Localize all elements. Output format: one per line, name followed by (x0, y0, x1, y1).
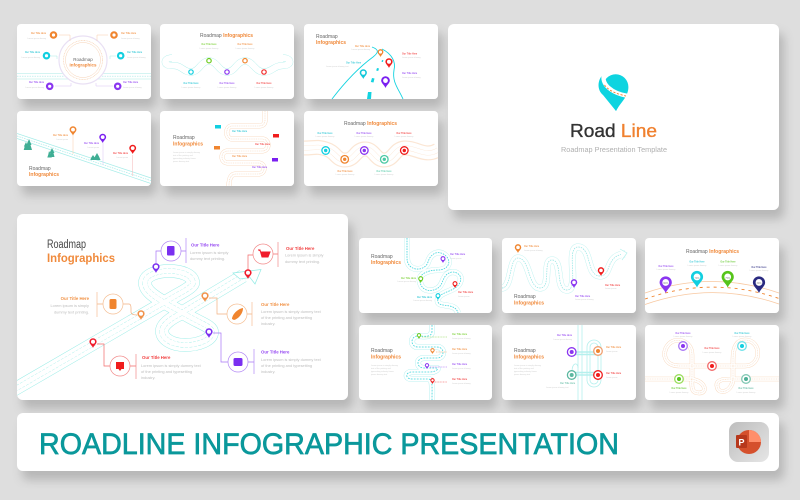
central ring (59, 36, 107, 84)
percent pins (660, 271, 765, 293)
thumbnail: junction road (502, 325, 636, 400)
labels: Lorem ipsum dummy text (546, 386, 569, 389)
text: orange right: Lorem ipsum is simply dummy text (261, 309, 322, 314)
labels: Lorem ipsum dummy (657, 269, 675, 271)
labels: Our Title Here (734, 332, 750, 335)
labels: Our Title Here (356, 132, 372, 135)
roads (572, 325, 601, 400)
labels: Lorem ipsum dummy (255, 87, 273, 89)
flags (214, 125, 279, 162)
paragraph: ipsum dummy text (173, 160, 190, 163)
text: purple lower (261, 350, 322, 374)
connectors (51, 35, 116, 86)
labels: Our Title Here (346, 62, 362, 64)
paragraph (371, 365, 398, 376)
labels (21, 32, 146, 89)
wave road (165, 58, 290, 72)
text: purple top: Our Title Here (191, 242, 220, 248)
heading (371, 254, 401, 266)
labels: Lorem ipsum dummy (452, 338, 471, 340)
road bands (17, 74, 151, 79)
trees (24, 139, 101, 160)
text: orange right (261, 302, 322, 326)
labels: Lorem ipsum dummy text (326, 65, 349, 68)
text: red top: Lorem ipsum is simply (285, 252, 324, 258)
labels: Lorem ipsum dummy (27, 38, 46, 40)
labels: Lorem ipsum dummy (21, 57, 40, 59)
figure-eight road (10, 271, 243, 392)
banner title: ROADLINE INFOGRAPHIC PRESENTATION (39, 428, 619, 461)
labels: Our Title Here (720, 260, 736, 264)
icon: rocket (232, 308, 243, 320)
labels: Our Title Here (402, 52, 418, 56)
labels: Our Title Here (396, 132, 412, 135)
heading (29, 166, 59, 178)
road (17, 134, 151, 184)
pins (70, 126, 136, 154)
text: orange right: of the printing and typesetting (261, 315, 312, 320)
heading: Roadmap (29, 166, 51, 172)
subtitle: Roadmap Presentation Template (561, 147, 667, 154)
labels (232, 130, 271, 169)
heading: Roadmap (514, 348, 536, 354)
text: orange left: Our Title Here (61, 296, 90, 301)
ring title (69, 57, 97, 68)
percent pins: 75% (725, 277, 731, 280)
labels: Lorem ipsum dummy (375, 174, 393, 176)
labels: Our Title Here (232, 155, 248, 158)
heading: Roadmap (371, 348, 393, 354)
heading (371, 348, 401, 360)
marker centres (324, 149, 406, 161)
labels: Our Title Here (355, 45, 371, 48)
labels (524, 245, 621, 301)
node centres (570, 349, 600, 377)
labels: Lorem ipsum dummy (182, 87, 200, 89)
heading (173, 135, 203, 148)
labels: Lorem ipsum dummy (719, 265, 737, 267)
labels (397, 253, 474, 302)
dividers (97, 238, 278, 379)
road (222, 111, 268, 186)
text: orange left: dummy text printing. (54, 310, 89, 314)
labels: Our Title Here (121, 32, 137, 35)
labels (316, 132, 413, 176)
labels: Our Title Here (232, 130, 248, 133)
road (407, 238, 461, 313)
node centres (677, 344, 748, 381)
labels: Lorem ipsum (606, 377, 618, 379)
icon: message (116, 362, 124, 371)
icon: bag (110, 299, 116, 309)
lane dashes (367, 60, 383, 99)
heading (316, 34, 346, 46)
paragraph: ipsum dummy text (514, 373, 531, 376)
labels: Lorem ipsum dummy (316, 136, 334, 138)
text: purple lower: Our Title Here (261, 350, 290, 354)
labels: Our Title Here (84, 142, 100, 145)
labels (546, 334, 622, 389)
labels: Our Title Here (658, 265, 674, 268)
text: purple top: dummy text printing. (190, 256, 225, 261)
thumbnail: circular roadmap (17, 24, 151, 99)
thumbnail: diagonal road with trees (17, 111, 151, 186)
labels: Lorem ipsum dummy (670, 392, 688, 394)
pins (417, 333, 435, 384)
labels: Our Title Here (524, 245, 540, 248)
labels: Our Title Here (201, 43, 217, 46)
banner (17, 413, 779, 471)
road (407, 325, 443, 400)
thumbnail: arc road with percent pins (645, 238, 779, 313)
labels: Our Title Here (557, 334, 573, 337)
labels: Our Title Here (29, 81, 45, 84)
heading: Infographics (173, 142, 203, 148)
thumbnail: looping orange road (645, 325, 779, 400)
paragraph: typesetting industry lorem (173, 157, 196, 160)
text: red lower: industry. (141, 375, 155, 380)
markers (189, 58, 266, 74)
labels: Our Title Here (317, 132, 333, 135)
labels: Lorem ipsum dummy (336, 174, 354, 176)
labels: Our Title Here (123, 81, 139, 84)
labels: Our Title Here (450, 253, 466, 256)
heading: Roadmap (173, 135, 195, 141)
labels: Our Title Here (25, 51, 41, 54)
thumbnail: wave road (160, 24, 294, 99)
paragraph: Lorem ipsum is simply dummy (514, 365, 541, 367)
labels: Lorem ipsum dummy (397, 281, 416, 283)
heading: Infographics (371, 260, 401, 266)
labels: Our Title Here (256, 82, 272, 85)
labels: Lorem ipsum dummy (236, 48, 254, 50)
nodes (567, 347, 602, 379)
labels: Lorem ipsum dummy (553, 339, 572, 341)
text: red top (285, 246, 324, 264)
text: purple lower: Lorem ipsum is simply dummy text (261, 357, 322, 362)
paragraph: typesetting industry lorem (371, 370, 394, 373)
pins (515, 244, 604, 288)
labels: Lorem ipsum dummy (402, 77, 421, 79)
labels: Lorem ipsum dummy (351, 49, 370, 51)
heading: Roadmap Infographics (200, 33, 253, 39)
heading: Infographics (514, 354, 544, 360)
heading: Infographics (514, 300, 544, 306)
labels: Our Title Here (605, 284, 621, 287)
labels: Our Title Here (675, 332, 691, 335)
labels: Our Title Here (452, 363, 468, 366)
labels: Lorem ipsum (450, 258, 462, 260)
labels: Lorem ipsum dummy (355, 136, 373, 138)
markers (322, 147, 408, 163)
percent pins: 70% (694, 277, 700, 280)
labels: Our Title Here (219, 82, 235, 85)
heading: Roadmap (47, 239, 86, 251)
heading: Roadmap (371, 254, 393, 260)
labels: Our Title Here (452, 333, 468, 336)
heading: Roadmap Infographics (344, 121, 397, 127)
labels (670, 332, 755, 394)
labels: Lorem ipsum dummy (750, 270, 768, 272)
text: red lower: Our Title Here (142, 355, 171, 360)
bubbles (43, 31, 125, 90)
heading: Infographics (29, 172, 59, 178)
paragraph: Lorem ipsum is simply dummy (173, 152, 200, 154)
labels: Lorem ipsum dummy (703, 352, 721, 354)
road (645, 340, 779, 393)
labels: Lorem ipsum dummy (452, 353, 471, 355)
labels: Lorem ipsum dummy (413, 300, 432, 302)
text: orange left: Lorem ipsum is simply (51, 303, 89, 308)
paragraph: ipsum dummy text (371, 373, 388, 376)
labels: Lorem ipsum dummy (452, 383, 471, 385)
connectors (97, 251, 278, 366)
icon: cart (258, 250, 270, 257)
labels: Our Title Here (183, 82, 199, 85)
icon: road line logo (599, 74, 628, 111)
heading: Roadmap Infographics (686, 249, 739, 255)
labels: Our Title Here (401, 277, 417, 280)
labels (452, 333, 471, 385)
heading (47, 239, 115, 265)
labels: Lorem ipsum dummy (200, 48, 218, 50)
labels: Our Title Here (31, 32, 47, 35)
labels: Lorem ipsum dummy (127, 57, 146, 59)
labels: Our Title Here (113, 152, 129, 155)
labels: Our Title Here (738, 387, 754, 390)
labels: Lorem ipsum dummy (121, 38, 140, 40)
labels (182, 43, 273, 89)
labels: Lorem ipsum dummy (402, 57, 421, 59)
text: purple top: Lorem ipsum is simply (190, 250, 229, 255)
arrow head (620, 249, 627, 260)
ring title: Roadmap (73, 57, 93, 62)
labels: Lorem ipsum dummy (524, 250, 543, 252)
nodes (675, 342, 750, 383)
text: red lower: Lorem ipsum is simply dummy text (141, 363, 202, 368)
ring title: Infographics (69, 62, 97, 68)
labels: Lorem ipsum (605, 288, 617, 290)
labels: Lorem ipsum (87, 147, 99, 149)
heading: Roadmap (316, 34, 338, 40)
paragraph: typesetting industry lorem (514, 370, 537, 373)
labels: Lorem ipsum dummy (575, 299, 594, 301)
arc road (645, 282, 779, 304)
labels: Lorem ipsum dummy (674, 336, 692, 338)
labels: Lorem ipsum (458, 296, 470, 298)
labels (657, 260, 768, 272)
labels: Our Title Here (402, 72, 418, 75)
percent pins: 90% (663, 282, 669, 285)
labels: Our Title Here (751, 266, 767, 269)
heading (514, 348, 544, 360)
paragraph (514, 365, 541, 376)
heading: Infographics (316, 40, 346, 46)
labels: Lorem ipsum dummy (218, 87, 236, 89)
thumbnail: serpentine road (160, 111, 294, 186)
text: orange left (51, 296, 90, 314)
labels: Lorem ipsum dummy (688, 265, 706, 267)
labels: Our Title Here (337, 170, 353, 173)
paragraph: text of the printing and (514, 367, 534, 370)
text: red lower (141, 355, 202, 380)
labels: Lorem ipsum dummy (733, 336, 751, 338)
thumbnail: wavy road with arrow (502, 238, 636, 313)
text: red top: Our Title Here (286, 246, 315, 251)
pointers (422, 337, 447, 382)
thumbnail: perspective road (304, 24, 438, 99)
labels: Our Title Here (704, 347, 720, 350)
labels: Our Title Here (252, 166, 268, 169)
text: orange right: Our Title Here (261, 302, 290, 307)
labels: Lorem ipsum dummy (452, 368, 471, 370)
pins (360, 49, 393, 88)
icon: PowerPoint: P (738, 438, 745, 448)
labels: Lorem ipsum dummy (25, 87, 44, 89)
panel: cover slide (448, 24, 779, 210)
labels: Our Title Here (237, 43, 253, 46)
labels: Our Title Here (53, 134, 69, 137)
paragraph: Lorem ipsum is simply dummy (371, 365, 398, 367)
labels: Lorem ipsum dummy (737, 392, 755, 394)
text: orange right: industry. (261, 321, 275, 326)
labels: Our Title Here (560, 382, 576, 385)
labels (326, 45, 421, 79)
labels: Our Title Here (417, 296, 433, 299)
paragraph: text of the printing and (371, 367, 391, 370)
text: purple lower: of the printing and typesetting (261, 363, 312, 368)
labels: Lorem ipsum dummy (395, 136, 413, 138)
text: red top: dummy text printing. (285, 259, 320, 264)
text: purple top (190, 242, 229, 261)
labels: Our Title Here (376, 170, 392, 173)
labels: Our Title Here (606, 372, 622, 375)
pins (89, 263, 252, 348)
labels: Lorem ipsum (606, 351, 618, 353)
arrow head (233, 270, 261, 284)
heading (514, 294, 544, 306)
text: purple lower: industry. (261, 369, 275, 374)
icon: PowerPoint (729, 422, 769, 462)
thumbnail: wavy road with circles (304, 111, 438, 186)
labels (53, 134, 129, 159)
labels: Lorem ipsum dummy (123, 87, 142, 89)
wavy road (304, 147, 438, 160)
panel: main figure-eight roadmap (10, 214, 348, 400)
road (502, 247, 625, 290)
labels: Our Title Here (575, 295, 591, 298)
labels: Our Title Here (255, 143, 271, 146)
paragraph: text of the printing and (173, 154, 193, 157)
heading: Infographics (47, 251, 115, 265)
text: red lower: of the printing and typesetting (141, 369, 192, 374)
labels: Our Title Here (127, 51, 143, 54)
pin stems (73, 134, 132, 176)
labels: Our Title Here (452, 378, 468, 381)
pins (418, 256, 458, 300)
icon: document (167, 246, 174, 256)
percent pins: 30% (756, 282, 762, 285)
labels: Our Title Here (452, 348, 468, 351)
thumbnail: winding teal road (359, 238, 492, 313)
brand name: Road Line (570, 120, 657, 141)
icon circles (103, 241, 273, 376)
icon: calendar (234, 358, 242, 366)
labels: Our Title Here (606, 346, 622, 349)
labels: Lorem ipsum (116, 157, 128, 159)
labels: Our Title Here (458, 291, 474, 294)
road edges (332, 47, 403, 99)
thumbnail: vertical switchback road (359, 325, 492, 400)
labels: Our Title Here (671, 387, 687, 390)
heading: Infographics (371, 354, 401, 360)
labels: Our Title Here (689, 260, 705, 264)
labels: Lorem ipsum (56, 139, 68, 141)
paragraph (173, 152, 200, 163)
heading: Roadmap (514, 294, 536, 300)
